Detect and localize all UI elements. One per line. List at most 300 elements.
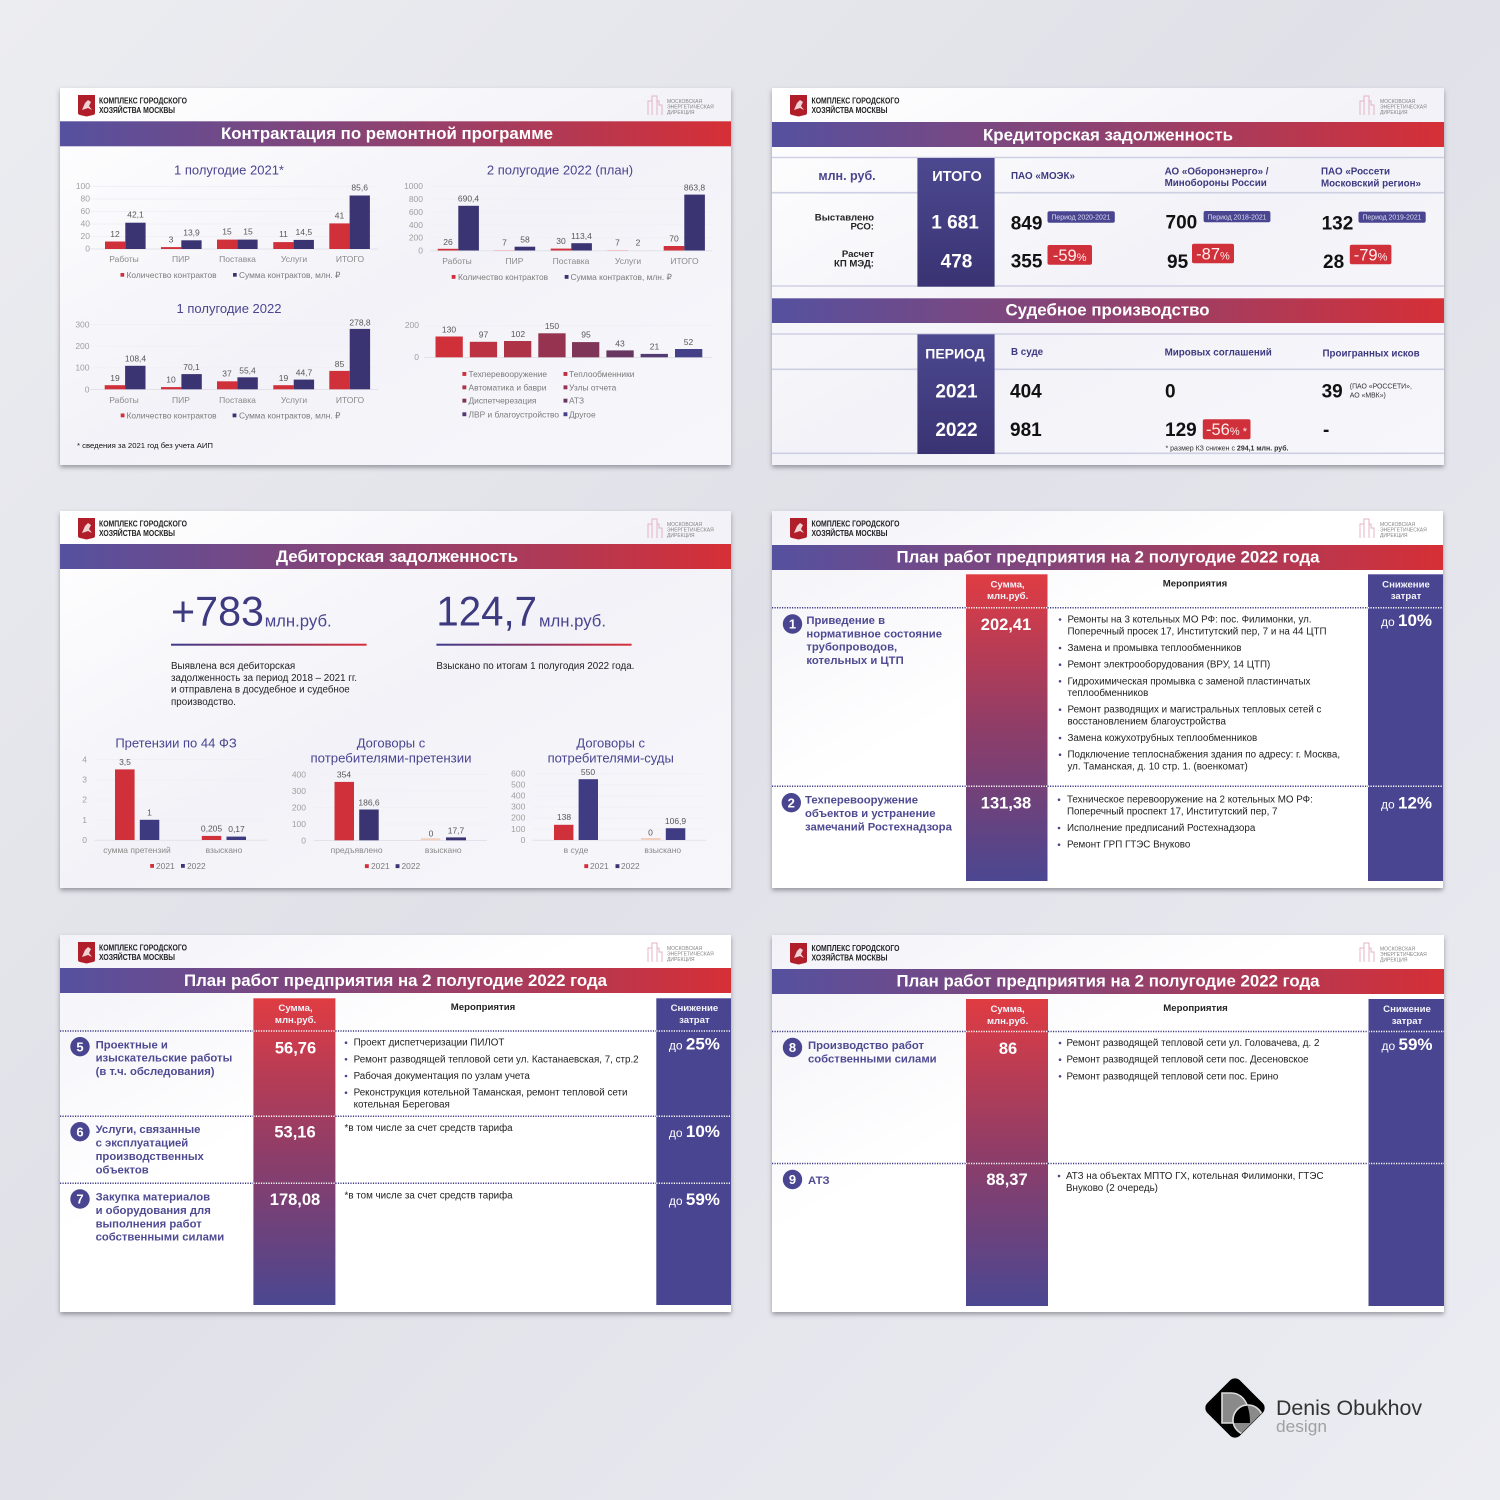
chart: 1 полугодие 2021: Услуги	[281, 254, 307, 264]
slide title band: План работ предприятия на 2 полугодие 2022 года	[896, 548, 1320, 566]
row 1: ул. Таманская, д. 10 стр. 1. (военкомат)	[1068, 761, 1248, 772]
chart: claims 44 FZ: 0,205	[201, 824, 222, 834]
header logo: energy directorate: МОСКОВСКАЯ	[1380, 99, 1415, 105]
chart: consumer contracts courts: 0	[521, 835, 526, 845]
chart: program categories: Автоматика и баври	[468, 382, 547, 392]
row 5: Проектные и	[96, 1039, 168, 1051]
row 6: до 10%	[669, 1122, 720, 1141]
debt table: 478	[941, 252, 972, 273]
row 2: 2	[788, 795, 795, 810]
debt table: Период 2019-2021	[1362, 215, 1422, 222]
litigation table: 981	[1010, 420, 1042, 441]
column: cost reduction	[656, 998, 731, 1305]
litigation table: 39	[1322, 382, 1343, 403]
chart: consumer contracts courts: 600	[511, 768, 526, 778]
chart: 2 полугодие 2022: 2	[636, 238, 641, 248]
litigation table: -	[1323, 420, 1329, 441]
debt table: Период 2018-2021	[1207, 214, 1267, 221]
litigation table: 404	[1010, 382, 1042, 403]
row 1: до 10%	[1381, 611, 1432, 630]
row 2: объектов и устранение	[805, 808, 936, 820]
column: cost reduction: Снижение	[1383, 1004, 1431, 1015]
chart: program categories: Диспетчерезация	[468, 396, 536, 406]
header logo: energy directorate: ДИРЕКЦИЯ	[1380, 533, 1408, 539]
slide title band	[772, 969, 1444, 994]
chart: 2 полугодие 2022: 26	[443, 237, 453, 247]
header logo: Moscow city complex: КОМПЛЕКС ГОРОДСКОГО	[812, 518, 900, 528]
row 8: до 59%	[1381, 1035, 1433, 1054]
chart: 1 полугодие 2021: 60	[81, 206, 90, 216]
header logo: Moscow city complex: ХОЗЯЙСТВА МОСКВЫ	[812, 952, 888, 962]
chart: consumer contracts claims: потребителями-претензии	[310, 751, 472, 766]
chart: 1 полугодие 2021: 20	[81, 231, 90, 241]
stat: collected receivables: Взыскано по итогам 1 полугодия 2022 года.	[436, 661, 634, 672]
chart: consumer contracts courts: 100	[511, 824, 526, 834]
header logo: Moscow city complex: КОМПЛЕКС ГОРОДСКОГО	[99, 942, 187, 952]
chart: 1 полугодие 2022: Услуги	[281, 395, 307, 405]
chart: consumer contracts claims: 200	[292, 802, 306, 812]
header logo: Moscow city complex	[78, 95, 187, 116]
chart: claims 44 FZ: 0	[82, 835, 87, 845]
header logo: energy directorate: ДИРЕКЦИЯ	[1380, 958, 1408, 964]
wordmark: design	[1276, 1417, 1327, 1436]
debt table	[772, 158, 1444, 287]
chart: consumer contracts courts: 2022	[621, 861, 640, 871]
slide title band: План работ предприятия на 2 полугодие 2022 года	[184, 972, 608, 990]
chart: claims 44 FZ: 1	[147, 808, 152, 818]
row 8: Производство работ	[808, 1040, 924, 1052]
row 1: теплообменников	[1068, 688, 1148, 699]
header logo: energy directorate	[1360, 96, 1427, 116]
slide title band: План работ предприятия на 2 полугодие 2022 года	[896, 972, 1320, 990]
chart: program categories: Другое	[569, 409, 596, 419]
chart: 1 полугодие 2021: 3	[169, 234, 174, 244]
row 6: 53,16	[274, 1123, 316, 1141]
header logo: Moscow city complex	[78, 942, 187, 964]
debt table: АО «Оборонэнерго» /	[1165, 166, 1269, 177]
chart: 1 полугодие 2022: 1 полугодие 2022	[177, 301, 281, 316]
row 1: Ремонт разводящих и магистральных тепловых сетей с	[1068, 705, 1322, 716]
chart: consumer contracts courts: потребителями-суды	[548, 751, 674, 766]
chart: 1 полугодие 2021: 15	[243, 226, 253, 236]
litigation table: 2022	[935, 420, 978, 441]
debt table: 95	[1167, 252, 1189, 273]
chart: 2 полугодие 2022: 70	[669, 234, 679, 244]
chart: consumer contracts courts: 300	[511, 802, 526, 812]
row 1: восстановлением благоустройства	[1068, 716, 1227, 727]
chart: 2 полугодие 2022: 7	[615, 238, 620, 248]
header logo: energy directorate: ЭНЕРГЕТИЧЕСКАЯ	[1380, 952, 1427, 958]
column: sum: Сумма,	[278, 1003, 313, 1014]
stat: revealed receivables	[171, 588, 367, 708]
row 7: Закупка материалов	[96, 1191, 210, 1203]
chart: program categories: ЛВР и благоустройство	[468, 409, 559, 419]
chart: consumer contracts claims: 186,6	[358, 798, 380, 808]
chart: 1 полугодие 2022: 85	[335, 359, 344, 369]
chart: 2 полугодие 2022: Сумма контрактов, млн. ₽	[570, 272, 672, 282]
slide title band	[60, 121, 731, 146]
panel: receivables slide	[60, 511, 731, 888]
row 7: 178,08	[270, 1191, 320, 1209]
chart: program categories: 95	[581, 330, 591, 340]
row 8	[783, 1035, 1433, 1082]
chart: 2 полугодие 2022	[404, 162, 712, 282]
row 5: до 25%	[669, 1035, 720, 1054]
chart: program categories: 52	[684, 337, 693, 347]
row 7: до 59%	[669, 1190, 720, 1209]
chart: consumer contracts claims: 354	[337, 770, 351, 780]
header logo: energy directorate	[648, 943, 714, 963]
column: cost reduction: затрат	[1391, 591, 1422, 602]
row 1: Ремонты на 3 котельных МО РФ: пос. Филимонки, ул.	[1068, 615, 1312, 626]
chart: consumer contracts courts: 0	[648, 828, 653, 838]
chart: 1 полугодие 2021: 14,5	[296, 227, 312, 237]
debt table: 355	[1011, 252, 1043, 273]
chart: 1 полугодие 2021: 85,6	[351, 182, 368, 192]
row 7	[70, 1189, 720, 1244]
footnote: * сведения за 2021 год без учета АИП	[77, 441, 213, 450]
chart: 1 полугодие 2022: 37	[222, 368, 232, 378]
chart: 2 полугодие 2022: 1000	[404, 181, 423, 191]
chart: 2 полугодие 2022: 863,8	[684, 182, 705, 192]
row 7: *в том числе за счет средств тарифа	[344, 1190, 513, 1201]
column heading: activities: Мероприятия	[1163, 579, 1227, 590]
litigation table: (ПАО «РОССЕТИ»,	[1350, 384, 1412, 391]
row 7: выполнения работ	[96, 1218, 202, 1230]
row 2: Ремонт ГРП ГТЭС Внуково	[1067, 840, 1191, 851]
chart: 1 полугодие 2021: 13,9	[183, 227, 200, 237]
row 9: АТЗ на объектах МПТО ГХ, котельная Филимонки, ГТЭС	[1066, 1171, 1324, 1182]
chart: claims 44 FZ: сумма претензий	[103, 845, 171, 855]
column: cost reduction	[1368, 574, 1443, 881]
row 5: (в т.ч. обследования)	[96, 1066, 215, 1078]
slide title band: Дебиторская задолженность	[276, 548, 518, 566]
header logo: Moscow city complex	[790, 943, 900, 964]
chart: consumer contracts claims: 400	[292, 769, 306, 779]
row 2: замечаний Ростехнадзора	[805, 821, 953, 833]
row 9: 88,37	[986, 1171, 1028, 1189]
column: sum: Сумма,	[990, 1004, 1025, 1015]
stat: revealed receivables: млн.руб.	[265, 612, 332, 630]
litigation table: АО «МВК»)	[1350, 392, 1386, 399]
column: cost reduction: затрат	[679, 1015, 710, 1026]
header logo: energy directorate: МОСКОВСКАЯ	[667, 522, 702, 528]
debt table: 1 681	[931, 212, 979, 233]
header logo: energy directorate	[648, 96, 714, 116]
row 5: Проект диспетчеризации ПИЛОТ	[354, 1038, 504, 1049]
header logo: energy directorate: ДИРЕКЦИЯ	[667, 533, 695, 539]
debt table: 28	[1323, 252, 1344, 273]
chart: consumer contracts claims: Договоры с	[357, 735, 426, 750]
debt table: КП МЭД:	[834, 258, 874, 269]
chart: 1 полугодие 2021: 41	[335, 210, 344, 220]
chart: 1 полугодие 2021: 11	[279, 229, 288, 239]
chart: 1 полугодие 2021: 1 полугодие 2021*	[174, 162, 284, 178]
debt table: Выставлено	[815, 212, 874, 223]
chart: 1 полугодие 2021: 12	[110, 229, 120, 239]
row 1: Приведение в	[806, 615, 885, 627]
row 5: Ремонт разводящей тепловой сети ул. Кастанаевская, 7, стр.2	[354, 1054, 639, 1065]
chart: consumer contracts courts: 200	[511, 813, 526, 823]
column heading: activities: Мероприятия	[1163, 1003, 1228, 1014]
chart: 1 полугодие 2021: 40	[81, 218, 90, 228]
row 9: Внуково (2 очередь)	[1066, 1183, 1158, 1194]
header logo: Moscow city complex: ХОЗЯЙСТВА МОСКВЫ	[99, 951, 175, 962]
chart: 1 полугодие 2021: 15	[222, 226, 232, 236]
chart: program categories: 43	[615, 338, 625, 348]
chart: 1 полугодие 2022: 19	[279, 373, 288, 383]
header logo: Moscow city complex	[790, 95, 900, 116]
chart: 1 полугодие 2021: ИТОГО	[336, 254, 365, 264]
header logo: Moscow city complex: ХОЗЯЙСТВА МОСКВЫ	[99, 527, 175, 538]
chart: 2 полугодие 2022: 200	[409, 233, 423, 243]
chart: 2 полугодие 2022: 58	[520, 234, 530, 244]
header logo: energy directorate: ДИРЕКЦИЯ	[667, 110, 695, 116]
column: sum: млн.руб.	[987, 591, 1028, 602]
row 1: Ремонт электрооборудования (ВРУ, 14 ЦТП)	[1068, 660, 1270, 671]
chart: 1 полугодие 2021	[76, 162, 378, 280]
chart: 1 полугодие 2022: 10	[166, 375, 176, 385]
chart: 2 полугодие 2022: 400	[409, 220, 423, 230]
chart: 1 полугодие 2021: 80	[81, 194, 90, 204]
chart: consumer contracts claims: 17,7	[448, 826, 465, 836]
chart: 1 полугодие 2022: 108,4	[125, 354, 146, 364]
row 8: Ремонт разводящей тепловой сети пос. Десеновское	[1066, 1055, 1309, 1066]
row 9: 9	[789, 1172, 796, 1187]
chart: 1 полугодие 2022: 100	[75, 363, 90, 373]
litigation table: В суде	[1011, 347, 1044, 358]
column: sum: Сумма,	[990, 579, 1025, 590]
chart: claims 44 FZ: 1	[82, 815, 87, 825]
chart: 1 полугодие 2021: ПИР	[172, 254, 190, 264]
icon: diamond monogram	[1205, 1378, 1265, 1438]
chart: 1 полугодие 2021: 42,1	[127, 210, 144, 220]
chart: 2 полугодие 2022: 2 полугодие 2022 (план)	[487, 162, 633, 178]
chart: program categories: 150	[545, 321, 559, 331]
header logo: energy directorate: ЭНЕРГЕТИЧЕСКАЯ	[1380, 528, 1427, 534]
chart: 1 полугодие 2022: 19	[110, 373, 120, 383]
row 1: Замена и промывка теплообменников	[1068, 643, 1241, 654]
chart: 2 полугодие 2022: Количество контрактов	[458, 272, 549, 282]
row 1	[783, 611, 1432, 772]
header logo: energy directorate: ЭНЕРГЕТИЧЕСКАЯ	[667, 528, 714, 534]
row 7: и оборудования для	[96, 1205, 211, 1217]
header logo: energy directorate: ЭНЕРГЕТИЧЕСКАЯ	[667, 952, 714, 958]
chart: consumer contracts claims: предъявлено	[331, 845, 383, 855]
litigation table: 129	[1165, 420, 1197, 441]
debt table: РСО:	[850, 222, 874, 233]
debt table: Московский регион»	[1321, 178, 1422, 189]
debt table: Минобороны России	[1165, 178, 1267, 189]
chart: 2 полугодие 2022: 113,4	[571, 231, 592, 241]
row 1: трубопроводов,	[806, 642, 897, 654]
designer logo	[1202, 1375, 1423, 1441]
row 1: Подключение теплоснабжения здания по адресу: г. Москва,	[1068, 750, 1340, 761]
chart: program categories: Техперевооружение	[468, 369, 547, 379]
debt table: Расчет	[842, 249, 874, 260]
column: cost reduction: Снижение	[671, 1003, 718, 1014]
chart: program categories: 102	[511, 329, 525, 339]
chart: 2 полугодие 2022: 7	[502, 238, 507, 248]
row 1: нормативное состояние	[806, 628, 942, 640]
chart: claims 44 FZ: 3,5	[119, 757, 131, 767]
header logo: Moscow city complex	[790, 518, 900, 540]
chart: consumer contracts claims: взыскано	[425, 845, 462, 855]
chart: consumer contracts courts: 2021	[590, 861, 609, 871]
row 9: АТЗ	[808, 1175, 830, 1187]
chart: 1 полугодие 2022: Поставка	[219, 395, 256, 405]
debt table: 132	[1322, 213, 1353, 234]
header logo: Moscow city complex: КОМПЛЕКС ГОРОДСКОГО	[99, 96, 187, 106]
row 5	[70, 1035, 720, 1110]
row 6	[70, 1122, 720, 1176]
litigation table: 2021	[935, 382, 978, 403]
chart: program categories: 0	[414, 352, 419, 362]
chart: 1 полугодие 2021: Поставка	[219, 254, 256, 264]
column: sum	[253, 998, 335, 1305]
litigation table: Проигранных исков	[1322, 349, 1420, 360]
chart: program categories: Узлы отчета	[569, 382, 617, 392]
chart: 1 полугодие 2021: 0	[85, 244, 90, 254]
debt table: ИТОГО	[932, 169, 982, 185]
chart: 2 полугодие 2022: ПИР	[506, 256, 524, 266]
row 8: Ремонт разводящей тепловой сети пос. Ерино	[1066, 1071, 1279, 1082]
chart: 2 полугодие 2022: 800	[409, 194, 423, 204]
chart: consumer contracts courts: в суде	[564, 845, 589, 855]
debt table: млн. руб.	[818, 169, 876, 183]
chart: claims 44 FZ: Претензии по 44 ФЗ	[115, 735, 237, 750]
debt table: ПАО «Россети	[1321, 166, 1390, 178]
row 5: изыскательские работы	[96, 1053, 232, 1065]
chart: 1 полугодие 2022: 0	[85, 384, 90, 394]
debt table: ПАО «МОЭК»	[1011, 171, 1076, 182]
chart: 2 полугодие 2022: Услуги	[615, 256, 641, 266]
header logo: energy directorate: МОСКОВСКАЯ	[667, 99, 702, 105]
header logo: energy directorate: ДИРЕКЦИЯ	[667, 957, 695, 963]
header logo: Moscow city complex: КОМПЛЕКС ГОРОДСКОГО	[812, 943, 900, 953]
chart: program categories: 21	[650, 342, 659, 352]
header logo: Moscow city complex	[78, 518, 187, 540]
chart: consumer contracts claims: 300	[292, 786, 306, 796]
chart: 1 полугодие 2022: Работы	[109, 395, 139, 405]
stat: collected receivables: млн.руб.	[539, 612, 606, 630]
row 7: собственными силами	[96, 1232, 224, 1244]
slide title band	[60, 544, 731, 569]
debt table: Период 2020-2021	[1051, 214, 1111, 222]
litigation table: * размер КЗ снижен с 294,1 млн. руб.	[1166, 444, 1289, 452]
chart: consumer contracts courts: 106,9	[665, 816, 686, 826]
header logo: energy directorate: ЭНЕРГЕТИЧЕСКАЯ	[1380, 104, 1427, 110]
header logo: energy directorate: МОСКОВСКАЯ	[1380, 522, 1415, 528]
stat: revealed receivables: производство.	[171, 697, 236, 708]
row 8: 86	[999, 1040, 1017, 1058]
row 1: 202,41	[981, 616, 1031, 634]
debt table: 700	[1166, 212, 1197, 233]
slide title band: Контрактация по ремонтной программе	[221, 125, 553, 143]
chart: 1 полугодие 2021: 100	[76, 181, 90, 191]
header logo: energy directorate: МОСКОВСКАЯ	[1380, 946, 1415, 952]
column: cost reduction: Снижение	[1382, 579, 1430, 590]
chart: consumer contracts claims: 0	[301, 835, 306, 845]
chart: 2 полугодие 2022: 30	[556, 236, 566, 246]
header logo: energy directorate	[1360, 943, 1427, 964]
header logo: Moscow city complex: КОМПЛЕКС ГОРОДСКОГО	[812, 96, 900, 106]
row 1: Поперечный просек 17, Институтский пер, 7 и на 44 ЦТП	[1068, 626, 1326, 637]
panel: work plan slide 1-2	[772, 511, 1443, 888]
chart: 1 полугодие 2021: Сумма контрактов, млн. ₽	[239, 270, 340, 280]
chart: 2 полугодие 2022: ИТОГО	[670, 256, 699, 266]
column heading: activities: Мероприятия	[451, 1002, 515, 1013]
chart: 1 полугодие 2021: Количество контрактов	[126, 270, 217, 280]
chart: claims 44 FZ: 4	[82, 754, 87, 764]
row 5: Рабочая документация по узлам учета	[354, 1071, 530, 1082]
chart: 1 полугодие 2022: 70,1	[183, 362, 200, 372]
row 5: Реконструкция котельной Таманская, ремонт тепловой сети	[354, 1088, 627, 1099]
litigation table: Мировых соглашений	[1165, 347, 1272, 358]
litigation table: -56% *	[1206, 421, 1248, 439]
litigation table: 0	[1165, 382, 1176, 403]
chart: program categories	[405, 320, 713, 419]
chart: consumer contracts courts: Договоры с	[576, 735, 645, 750]
chart: consumer contracts courts	[511, 735, 706, 871]
chart: consumer contracts courts: 400	[511, 791, 526, 801]
row 2: до 12%	[1381, 793, 1432, 812]
stat: revealed receivables: Выявлена вся дебиторская	[171, 661, 295, 672]
row 6: *в том числе за счет средств тарифа	[344, 1123, 513, 1134]
chart: claims 44 FZ	[82, 735, 267, 871]
chart: program categories: Теплообменники	[569, 369, 635, 379]
wordmark	[1276, 1397, 1423, 1436]
header logo: energy directorate	[1360, 519, 1427, 539]
chart: consumer contracts courts: взыскано	[644, 845, 681, 855]
chart: 2 полугодие 2022: Работы	[442, 256, 472, 266]
chart: 1 полугодие 2022	[75, 301, 378, 421]
column: cost reduction: затрат	[1392, 1016, 1423, 1027]
chart: claims 44 FZ: взыскано	[206, 845, 243, 855]
stat: collected receivables: 124,7	[436, 588, 537, 635]
litigation table	[772, 334, 1444, 454]
chart: 2 полугодие 2022: 600	[409, 207, 423, 217]
chart: 2 полугодие 2022: Поставка	[553, 256, 590, 266]
chart: 1 полугодие 2022: Сумма контрактов, млн. ₽	[239, 411, 340, 421]
chart: consumer contracts courts: 550	[581, 767, 595, 777]
debt table: 849	[1011, 213, 1042, 234]
stat: revealed receivables: задолженность за период 2018 – 2021 гг.	[171, 673, 357, 684]
row 5: 56,76	[275, 1039, 316, 1057]
row 6: объектов	[96, 1164, 149, 1176]
slide title band: Кредиторская задолженность	[983, 126, 1233, 144]
row 6: производственных	[96, 1151, 205, 1163]
row 2: Поперечный проспект 17, Институтский пер, 7	[1067, 806, 1278, 817]
chart: 1 полугодие 2022: 300	[75, 319, 90, 329]
row 6: Услуги, связанные	[96, 1124, 200, 1136]
column: sum: млн.руб.	[987, 1016, 1028, 1027]
row 5: котельная Береговая	[354, 1099, 450, 1110]
panel: work plan slide 8-9	[772, 935, 1444, 1312]
chart: 1 полугодие 2022: ИТОГО	[336, 395, 365, 405]
stat: revealed receivables: и отправлена в досудебное и судебное	[171, 685, 350, 696]
chart: 1 полугодие 2022: Количество контрактов	[126, 411, 217, 421]
chart: 1 полугодие 2021: Работы	[109, 254, 139, 264]
row 2: 131,38	[981, 794, 1031, 812]
row 8: 8	[789, 1040, 796, 1055]
stat: collected receivables	[436, 588, 634, 672]
chart: consumer contracts courts: 138	[557, 812, 571, 822]
chart: 1 полугодие 2022: 55,4	[239, 366, 256, 376]
chart: claims 44 FZ: 0,17	[228, 824, 245, 834]
chart: consumer contracts courts: 500	[511, 780, 526, 790]
header logo: Moscow city complex: ХОЗЯЙСТВА МОСКВЫ	[99, 104, 175, 115]
